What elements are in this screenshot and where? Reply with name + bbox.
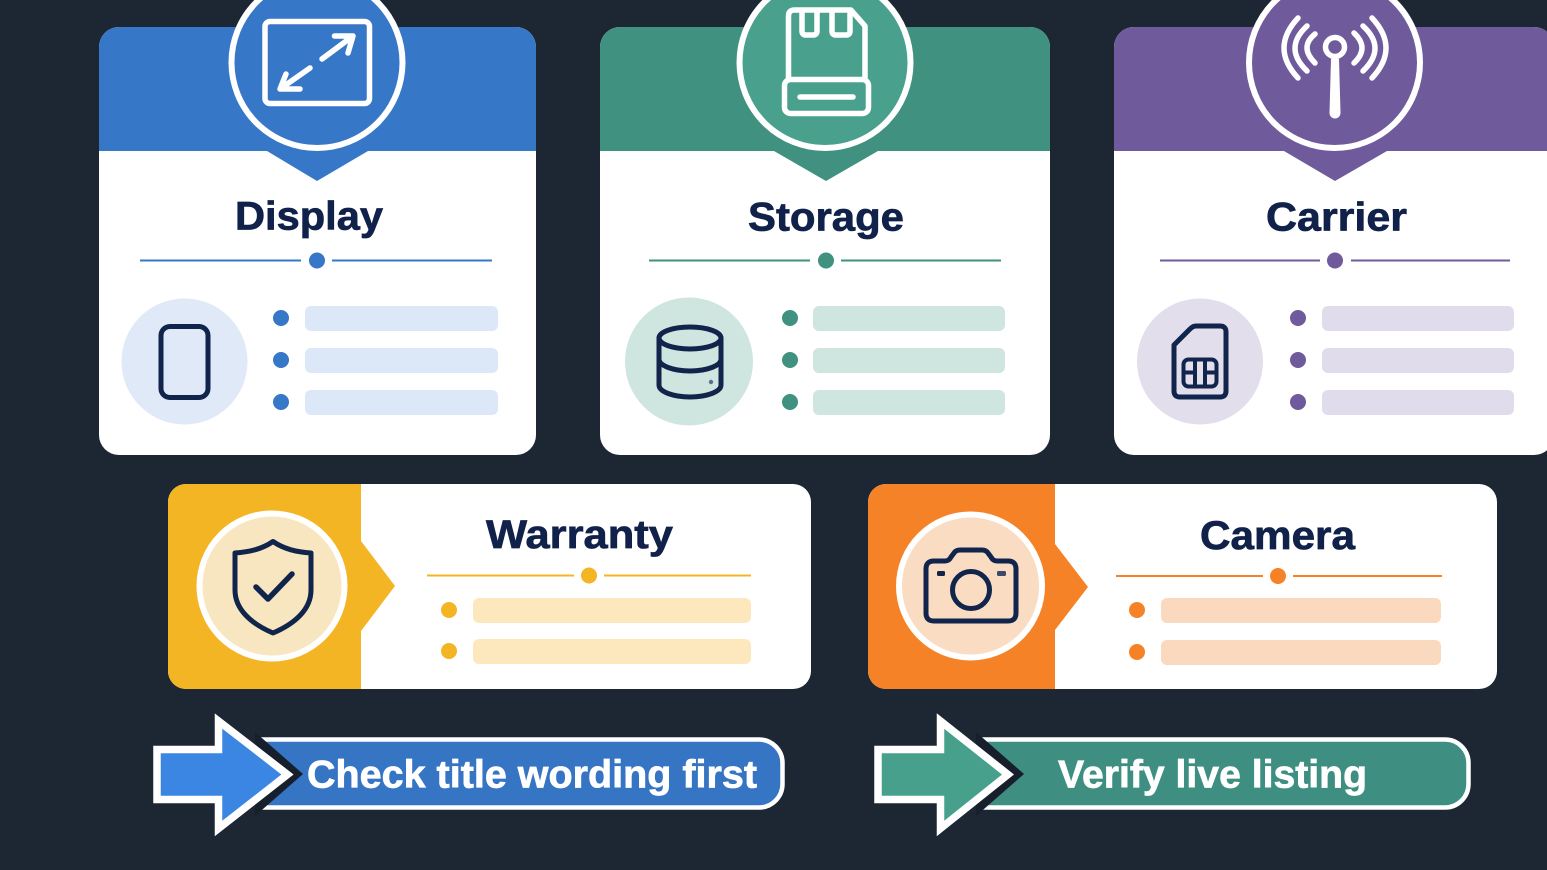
panel: Camera xyxy=(868,484,1497,689)
heading: Carrier: Carrier xyxy=(1266,196,1407,240)
arrow: blue xyxy=(157,721,303,828)
arrow: green xyxy=(878,721,1024,828)
Storage list placeholders xyxy=(782,306,1005,415)
heading: Warranty: Warranty xyxy=(486,513,674,557)
icon: memory card xyxy=(740,0,910,148)
icon: phone outline xyxy=(122,298,248,424)
callout text: Verify live listing xyxy=(1058,754,1367,796)
Warranty list placeholders xyxy=(441,598,751,664)
Storage divider xyxy=(649,252,1001,268)
Carrier list placeholders xyxy=(1290,306,1514,415)
panel: Storage xyxy=(600,0,1050,455)
icon: database xyxy=(625,298,753,426)
callout: Verify live listing xyxy=(878,721,1468,828)
Camera colour block with pointer xyxy=(868,484,1088,689)
panel: Carrier xyxy=(1114,0,1547,455)
Display header band xyxy=(99,27,536,151)
Storage header band xyxy=(600,27,1050,151)
Display divider xyxy=(140,252,492,268)
icon: camera xyxy=(899,514,1042,658)
panel: Display xyxy=(99,0,536,455)
Warranty divider xyxy=(427,568,751,584)
heading: Storage: Storage xyxy=(748,196,904,240)
Warranty colour block with pointer xyxy=(168,484,395,689)
icon: antenna signal xyxy=(1249,0,1420,148)
Camera divider xyxy=(1116,568,1442,584)
icon: screen size arrows xyxy=(232,0,402,148)
icon: SIM card xyxy=(1137,298,1263,424)
callout text: Check title wording first xyxy=(307,754,757,796)
Display badge pointer xyxy=(267,151,368,181)
icon: shield check xyxy=(200,514,344,658)
panel: Warranty xyxy=(168,484,811,689)
Display list placeholders xyxy=(273,306,498,415)
Carrier header band xyxy=(1114,27,1547,151)
callout: Check title wording first xyxy=(157,721,782,828)
heading: Display: Display xyxy=(235,194,384,238)
Camera list placeholders xyxy=(1129,598,1441,665)
Carrier badge pointer xyxy=(1284,151,1387,181)
Carrier divider xyxy=(1160,252,1510,268)
Storage badge pointer xyxy=(774,151,878,181)
heading: Camera: Camera xyxy=(1200,514,1356,558)
